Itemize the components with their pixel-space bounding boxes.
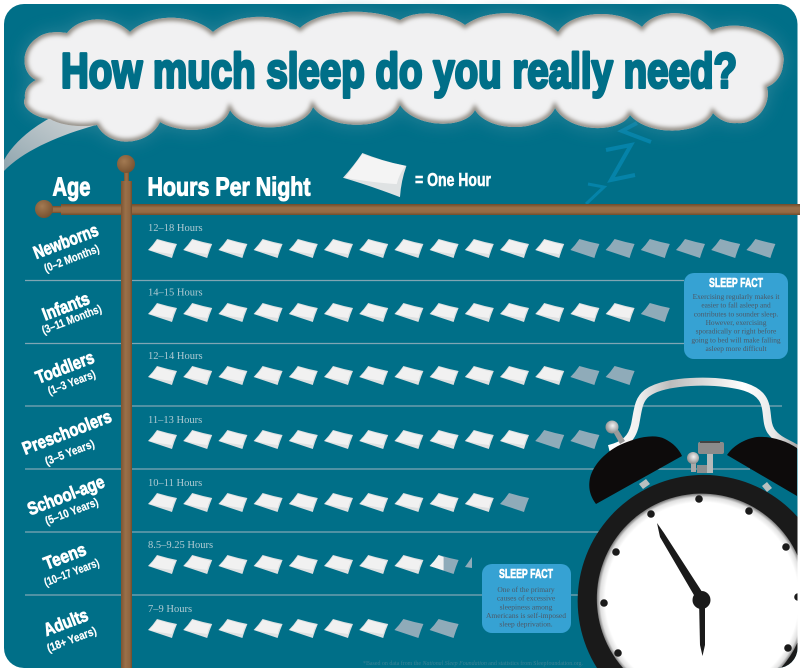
age label: Toddlers — [33, 347, 98, 398]
age label: Preschoolers: Preschoolers — [19, 406, 114, 459]
row: Teens 8.5–9.25 hours: 8.5–9.25 Hours — [148, 540, 213, 551]
column heading: Hours Per Night: Hours Per Night — [148, 172, 311, 202]
row: Infants 14–15 hours: 14–15 Hours — [148, 288, 203, 298]
age label: Preschoolers: (3–5 Years) — [44, 438, 96, 468]
age label: Infants: Infants — [39, 288, 92, 325]
age label: Toddlers: (1–3 Years) — [46, 369, 98, 398]
age label: Teens — [41, 539, 101, 589]
age label: Adults — [41, 605, 98, 655]
clock case — [578, 475, 798, 668]
row: Newborns 12–18 hours: 12–18 Hours — [148, 223, 203, 234]
row: Teens 8.5–9.25 hours — [148, 540, 472, 574]
callout: sleep fact deprivation: causes of excessive — [497, 594, 556, 603]
row divider lines — [25, 280, 782, 595]
callout: sleep fact deprivation — [482, 564, 571, 633]
row: Toddlers 12–14 hours — [148, 351, 635, 385]
row: Adults 7–9 hours: 7–9 Hours — [148, 604, 192, 615]
clock face — [597, 494, 798, 668]
clock hands — [657, 523, 710, 656]
callout: sleep fact exercise: Exercising regularly makes it — [693, 292, 780, 301]
legend: one pillow equals one hour — [343, 153, 491, 197]
callout: sleep fact exercise: going to bed will make falling — [691, 335, 781, 344]
age label: Infants — [39, 288, 104, 337]
callout: sleep fact exercise: SLEEP FACT — [709, 275, 763, 290]
callout: sleep fact exercise: sporadically or right before — [696, 327, 777, 336]
alarm clock — [578, 382, 798, 668]
bed rail rods — [35, 155, 800, 668]
age label: Teens: (10–17 Years) — [43, 557, 101, 589]
age label: Infants: (3–11 Months) — [40, 303, 104, 337]
age label: School-age: (5–10 Years) — [44, 497, 100, 528]
row: Adults 7–9 hours — [148, 604, 459, 638]
legend: one pillow equals one hour: = One Hour — [415, 170, 491, 190]
age label: School-age: School-age — [24, 472, 107, 519]
row: Toddlers 12–14 hours: 12–14 Hours — [148, 351, 203, 362]
clock hour ticks — [600, 495, 798, 657]
column heading: Age: Age — [52, 172, 90, 202]
callout: sleep fact deprivation: One of the primary — [497, 585, 555, 594]
speech cloud with title — [4, 12, 784, 171]
age label: Adults: Adults — [41, 605, 91, 640]
footnote source: *Based on data from the National Sleep Foundation and statistics from Sleepfoundation.org. — [363, 660, 583, 667]
row: Newborns 12–18 hours — [148, 223, 775, 258]
clock knob — [606, 420, 625, 444]
clock bell connectors — [639, 479, 772, 492]
row: School-age 10–11 hours — [148, 478, 529, 512]
row: Preschoolers 11–13 hours: 11–13 Hours — [148, 415, 202, 426]
icon: sleeping Z letters — [586, 123, 651, 204]
clock right bell — [727, 437, 797, 496]
age label: Adults: (18+ Years) — [46, 625, 98, 655]
age label: Preschoolers — [19, 406, 114, 468]
callout: sleep fact exercise: contributes to sounder sleep. — [694, 309, 778, 318]
callout: sleep fact deprivation: sleep deprivation. — [499, 620, 553, 629]
callout: sleep fact deprivation: sleepiness among — [500, 602, 553, 611]
age label: Toddlers: Toddlers — [33, 347, 97, 388]
callout: sleep fact exercise: easier to fall asleep and — [701, 301, 771, 310]
row: Infants 14–15 hours — [148, 288, 670, 322]
clock handle — [609, 382, 797, 449]
age label: Newborns — [31, 220, 101, 275]
callout: sleep fact exercise — [684, 273, 788, 359]
callout: sleep fact exercise: However, exercising — [706, 318, 767, 327]
clock alarm set button — [687, 441, 724, 473]
age label: Teens: Teens — [41, 539, 89, 574]
callout: sleep fact exercise: asleep more difficult — [705, 344, 767, 353]
age label: Newborns: (0–2 Months) — [43, 243, 101, 275]
callout: sleep fact deprivation: Americans is self-imposed — [486, 611, 566, 620]
age label: Newborns: Newborns — [31, 220, 101, 263]
row: School-age 10–11 hours: 10–11 Hours — [148, 478, 202, 489]
row: Preschoolers 11–13 hours — [148, 415, 599, 449]
age label: School-age — [24, 472, 107, 528]
clock left bell — [589, 436, 682, 504]
callout: sleep fact deprivation: SLEEP FACT — [499, 566, 553, 581]
